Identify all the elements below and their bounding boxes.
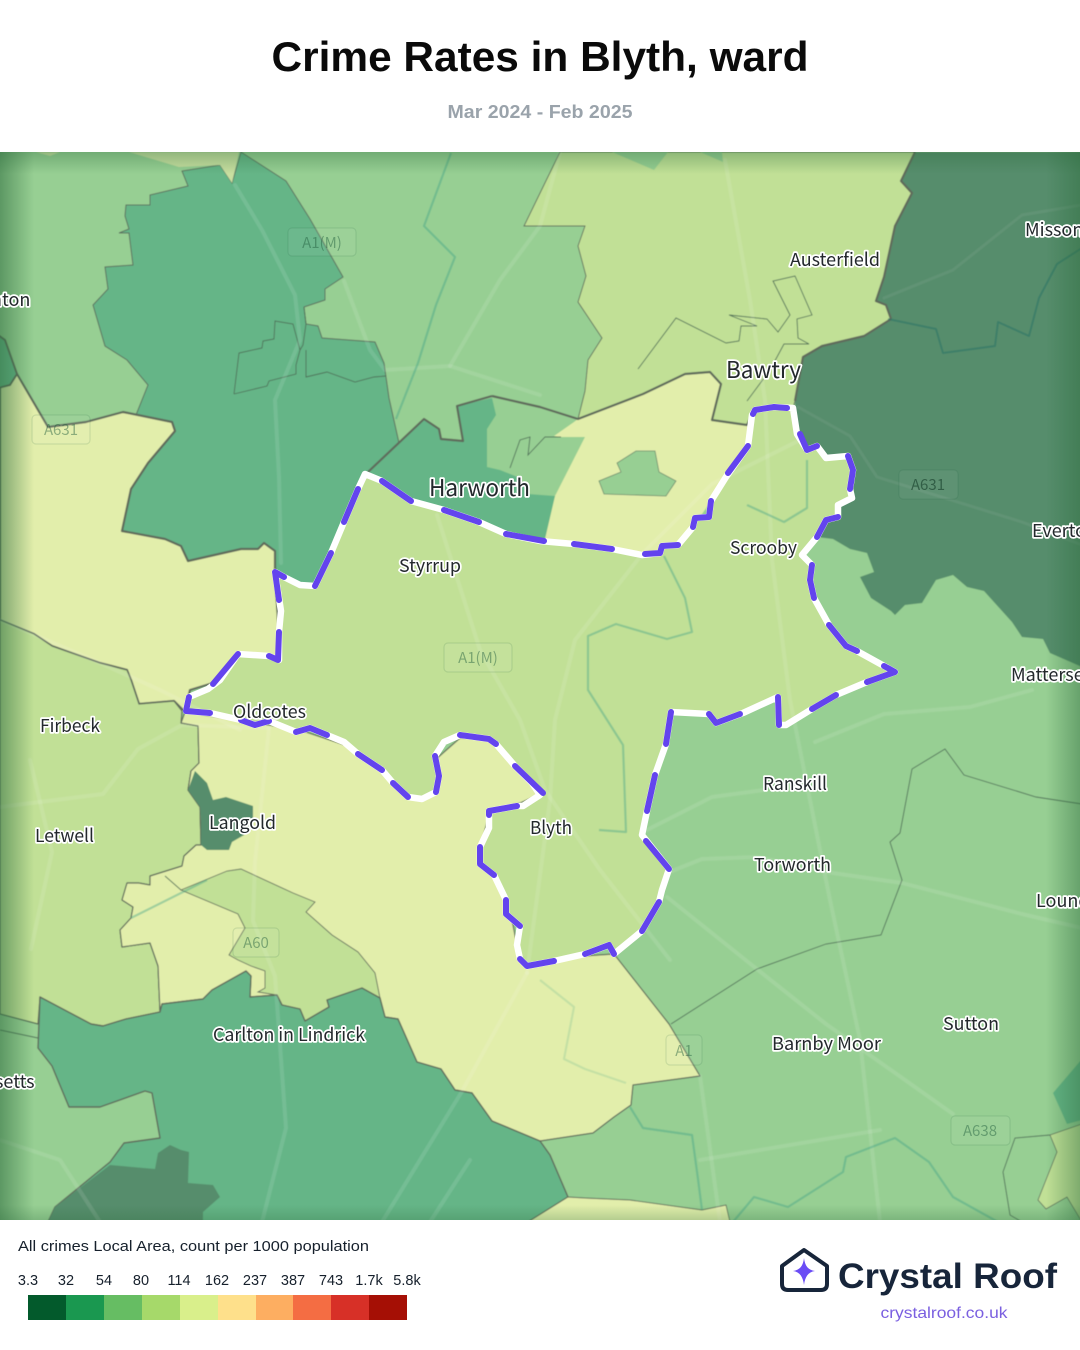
road number badges: A1(M) bbox=[302, 232, 342, 253]
place name labels: Styrrup bbox=[399, 552, 461, 578]
rivers bbox=[131, 153, 1080, 1222]
region: Austerfield and Bawtry bbox=[524, 152, 915, 425]
legend values: 5.8k bbox=[393, 1273, 421, 1289]
place name labels: Bawtry bbox=[726, 351, 801, 385]
place name labels: Blyth bbox=[530, 814, 572, 840]
road number badges: A1(M) bbox=[458, 647, 498, 668]
legend values: 387 bbox=[281, 1273, 305, 1289]
place name labels: Letwell bbox=[35, 822, 94, 848]
region: pale between Harworth and Bawtry bbox=[540, 372, 752, 555]
region: lime north of Carlton bbox=[181, 869, 380, 1021]
Blyth ward outline: purple dashes bbox=[186, 407, 895, 966]
road number badges: A638 bbox=[963, 1120, 997, 1141]
legend values bbox=[18, 1273, 421, 1289]
place name labels: Firbeck bbox=[40, 712, 100, 738]
road number badges: A631 bbox=[911, 474, 945, 495]
place name labels: Barnby Moor bbox=[772, 1030, 882, 1056]
region: darker west area north of Harworth bbox=[93, 152, 399, 586]
region: dark east bbox=[795, 152, 1080, 667]
region: Harworth bbox=[365, 398, 555, 541]
place name labels: Sutton bbox=[943, 1010, 999, 1036]
road number badges: A60 bbox=[243, 932, 269, 953]
Blyth ward outline: white line bbox=[186, 407, 895, 966]
road network bbox=[0, 152, 1080, 1222]
region: pale central south bbox=[120, 712, 700, 1141]
region: lime Firbeck and Letwell bbox=[0, 620, 201, 1026]
region: pale sliver top bbox=[129, 152, 239, 183]
place name labels: Carlton in Lindrick bbox=[213, 1021, 365, 1047]
place name labels: Langold bbox=[209, 809, 276, 835]
legend bbox=[18, 1238, 421, 1320]
road number badges: A631 bbox=[44, 419, 78, 440]
legend title: All crimes Local Area, count per 1000 population bbox=[18, 1238, 369, 1255]
road number badges: A1 bbox=[675, 1040, 693, 1061]
region: pale strip at bottom bbox=[528, 1197, 730, 1222]
region: Blyth ward fill bbox=[186, 407, 895, 966]
region: pocket in pale area bbox=[599, 451, 676, 496]
legend values: 32 bbox=[58, 1273, 74, 1289]
legend values: 237 bbox=[243, 1273, 267, 1289]
place name labels: Oldcotes bbox=[233, 698, 306, 724]
road number badges bbox=[32, 228, 1010, 1145]
brand logo bbox=[782, 1250, 1057, 1322]
region: pale west area bbox=[0, 374, 279, 712]
title: Crime Rates in Blyth, ward bbox=[272, 33, 808, 80]
place name labels: Torworth bbox=[754, 851, 831, 877]
legend values: 114 bbox=[167, 1273, 191, 1289]
legend values: 1.7k bbox=[355, 1273, 383, 1289]
legend values: 743 bbox=[319, 1273, 343, 1289]
subtitle: date range: Mar 2024 - Feb 2025 bbox=[448, 102, 632, 122]
place name labels: Scrooby bbox=[730, 534, 798, 560]
legend values: 3.3 bbox=[18, 1273, 38, 1289]
legend colour bar bbox=[28, 1295, 407, 1320]
icon: house with star bbox=[782, 1250, 827, 1290]
place name labels: Ranskill bbox=[763, 770, 827, 796]
region: top wedges bbox=[612, 152, 668, 170]
place name labels: Austerfield bbox=[790, 246, 880, 272]
region: small dark edge area bbox=[0, 335, 17, 388]
place name labels bbox=[0, 216, 1080, 1094]
ward subdivision and boundary lines bbox=[0, 276, 1080, 1222]
legend values: 80 bbox=[133, 1273, 149, 1289]
place name labels: Harworth bbox=[429, 469, 530, 503]
brand name: Crystal Roof bbox=[838, 1257, 1057, 1296]
region: dark south area bbox=[48, 1145, 220, 1222]
map edge vignette bbox=[0, 152, 1080, 1220]
region: Carlton in Lindrick bbox=[38, 971, 568, 1222]
county boundary lines bbox=[368, 152, 915, 472]
legend values: 54 bbox=[96, 1273, 112, 1289]
region: east edge dark and pale bbox=[1053, 1059, 1080, 1124]
region: Langold bbox=[188, 771, 253, 850]
brand url: crystalroof.co.uk bbox=[880, 1305, 1009, 1322]
legend values: 162 bbox=[205, 1273, 229, 1289]
